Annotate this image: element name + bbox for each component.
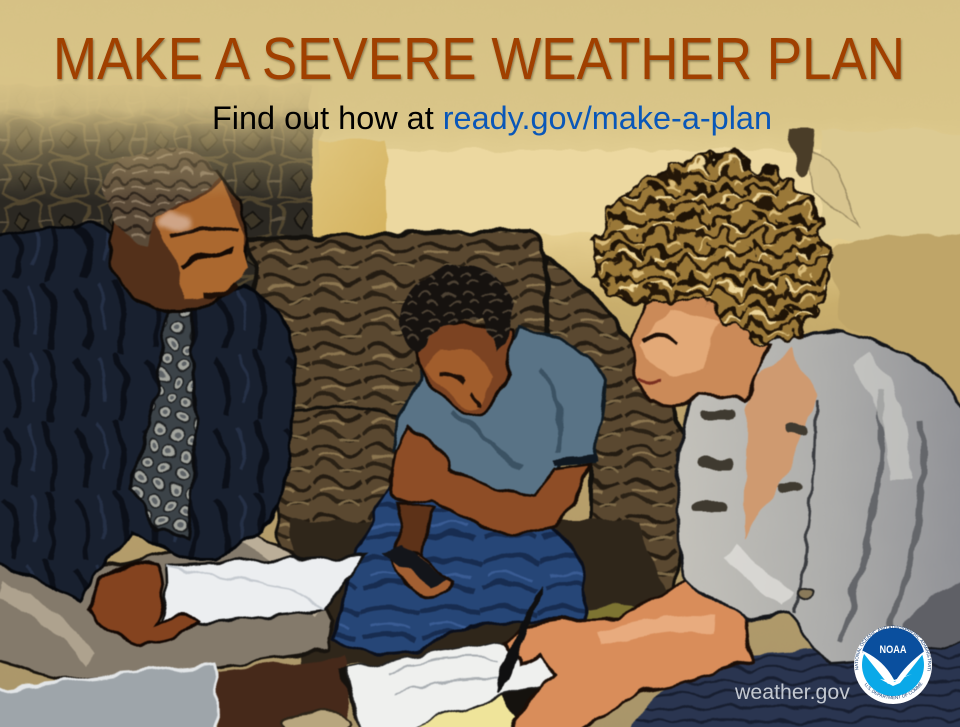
weather.gov label: weather.gov <box>734 680 850 704</box>
boy: arm and hand <box>390 428 590 533</box>
boy: T-shirt <box>392 328 605 505</box>
woman: jeans <box>630 640 960 727</box>
man: trousers <box>0 530 335 680</box>
NOAA logo: NATIONAL OCEANIC AND ATMOSPHERIC ADMINISTRATION <box>854 626 932 671</box>
coffee table <box>216 656 350 727</box>
laptop <box>0 664 216 727</box>
subtitle with link: Find out how at ready.gov/make-a-plan <box>212 100 772 136</box>
sofa <box>250 231 690 670</box>
pen <box>495 588 541 694</box>
man: hand <box>90 563 200 645</box>
paper held by man <box>158 556 366 630</box>
boy: jeans <box>335 480 586 653</box>
dark patterned wallpaper, left <box>0 85 312 325</box>
woman: head and hair <box>592 158 831 404</box>
NOAA logo: U.S. DEPARTMENT OF COMMERCE <box>864 682 923 700</box>
woman: blouse <box>678 330 960 665</box>
NOAA logo: NOAA <box>880 644 907 656</box>
boy: head <box>400 265 512 416</box>
man: tie <box>132 312 197 540</box>
fade of top into tan background <box>0 78 320 200</box>
man: head <box>100 148 250 312</box>
woman: arm <box>505 578 750 727</box>
man: shirt <box>0 222 294 600</box>
notebook <box>338 638 575 727</box>
